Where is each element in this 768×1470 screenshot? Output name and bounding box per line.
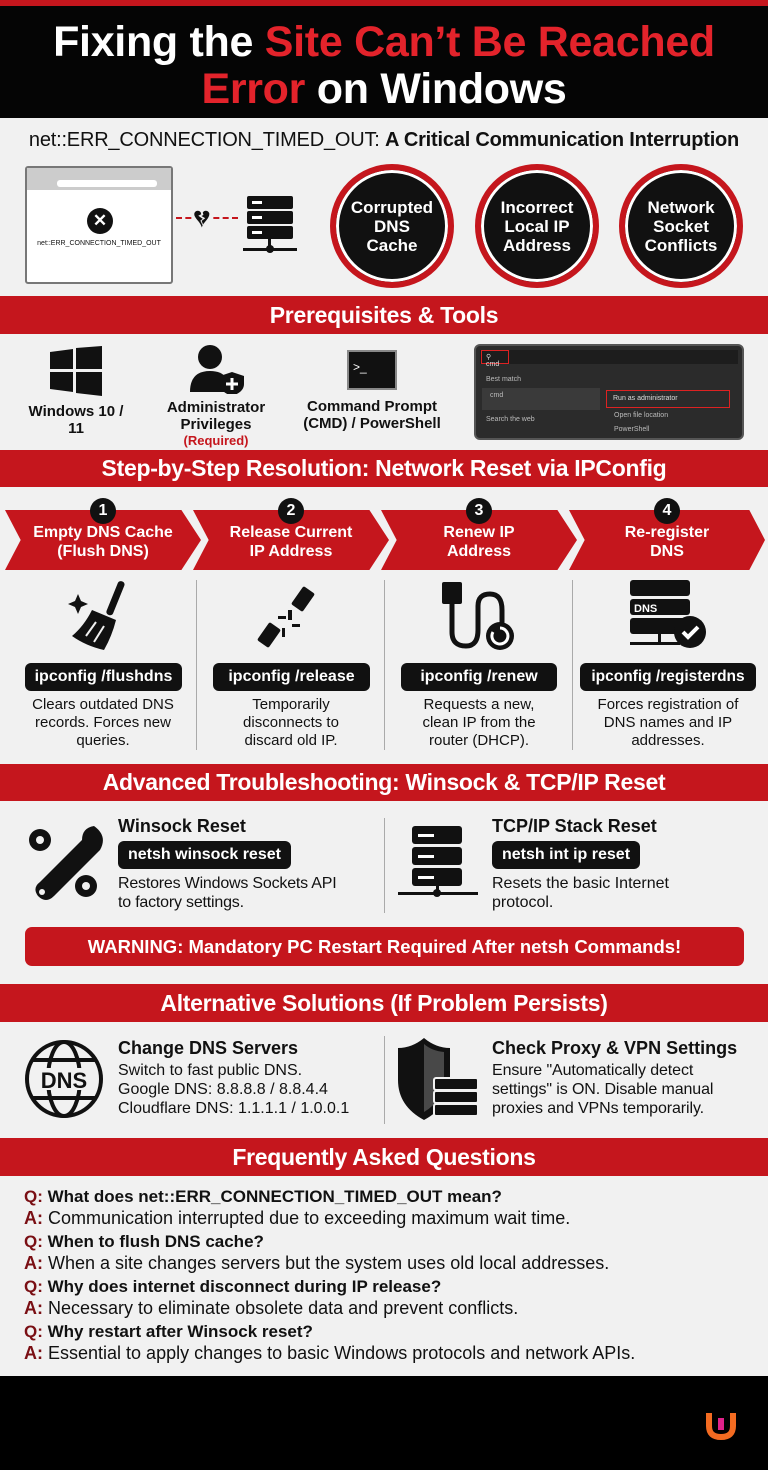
cause: Corrupted DNS Cache bbox=[330, 164, 454, 288]
heading: step-by-step: Step-by-Step Resolution: Network Reset via IPConfig bbox=[102, 455, 666, 481]
cause: Incorrect Local IP Address: Address bbox=[503, 236, 571, 254]
command 3: ipconfig /renew bbox=[420, 668, 538, 685]
cause: Network Socket Conflicts: Network bbox=[647, 198, 715, 216]
prereq: windows bbox=[28, 346, 124, 437]
icon: shield with server bbox=[398, 1038, 477, 1120]
icon: DNS server with check: DNS bbox=[634, 603, 657, 615]
screenshot: run as admin bbox=[474, 344, 744, 440]
proxy block: proxies and VPNs temporarily. bbox=[492, 1100, 704, 1117]
tcp/ip block: TCP/IP Stack Reset bbox=[492, 816, 657, 836]
command 4: ipconfig /registerdns bbox=[591, 668, 745, 685]
title bbox=[53, 18, 715, 113]
desc 1: Clears outdated DNS records. Forces new queries. bbox=[32, 696, 174, 749]
heading: Prerequisites bbox=[0, 296, 768, 334]
desc 3: Requests a new, clean IP from the router (DHCP). bbox=[422, 696, 536, 749]
subtitle: net::ERR_CONNECTION_TIMED_OUT: A Critical Communication Interruption bbox=[29, 129, 739, 151]
arrow with broken heart: 💔︎ bbox=[194, 203, 210, 233]
screenshot: run as admin: PowerShell bbox=[614, 426, 649, 433]
prereq: cmd: >_ bbox=[353, 360, 367, 374]
FAQ list: A: When a site changes servers but the system uses old local addresses. bbox=[24, 1253, 609, 1273]
tcp/ip block: Resets the basic Internet bbox=[492, 875, 669, 892]
screenshot: run as admin: cmd bbox=[490, 392, 503, 399]
FAQ list: Q: Why restart after Winsock reset? bbox=[24, 1322, 313, 1341]
step 2 header: Release Current bbox=[230, 524, 352, 541]
winsock block: Winsock Reset bbox=[118, 816, 246, 836]
screenshot: run as admin: ⚲ cmd bbox=[486, 354, 499, 368]
footer band bbox=[0, 1376, 768, 1470]
step 3 header: Address bbox=[447, 543, 511, 560]
FAQ list: A: Necessary to eliminate obsolete data and prevent conflicts. bbox=[24, 1298, 518, 1318]
tcp/ip block: protocol. bbox=[492, 894, 553, 911]
heading: Prerequisites: Prerequisites & Tools bbox=[270, 302, 498, 328]
proxy block bbox=[492, 1038, 737, 1117]
change DNS block: Cloudflare DNS: 1.1.1.1 / 1.0.0.1 bbox=[118, 1100, 349, 1117]
step arrows bbox=[5, 498, 765, 570]
prereq: windows: 11 bbox=[68, 420, 84, 437]
heading: FAQ bbox=[0, 1138, 768, 1176]
command 3 bbox=[401, 663, 557, 691]
command 1: ipconfig /flushdns bbox=[35, 668, 172, 685]
title: Fixing the Site Can’t Be Reached bbox=[53, 18, 715, 66]
step 3 header bbox=[381, 510, 577, 570]
prereq: admin: Privileges bbox=[181, 416, 251, 433]
cause: Corrupted DNS Cache: DNS bbox=[374, 216, 410, 236]
FAQ list: Q: Why does internet disconnect during IP release? bbox=[24, 1277, 441, 1296]
change DNS block: Change DNS Servers bbox=[118, 1038, 298, 1058]
step arrows: 2 bbox=[287, 502, 295, 519]
prereq: cmd: Command Prompt bbox=[307, 398, 437, 415]
icon: DNS server with check bbox=[630, 580, 706, 648]
prereq: windows: Windows 10 / bbox=[29, 403, 123, 420]
heading: advanced bbox=[0, 764, 768, 801]
logo bbox=[706, 1413, 736, 1440]
winsock block bbox=[118, 816, 336, 911]
proxy block: settings" is ON. Disable manual bbox=[492, 1081, 713, 1098]
proxy block: Ensure "Automatically detect bbox=[492, 1062, 693, 1079]
screenshot: run as admin: Run as administrator bbox=[613, 395, 678, 402]
heading: step-by-step bbox=[0, 450, 768, 487]
winsock block: to factory settings. bbox=[118, 894, 244, 911]
step 4 header bbox=[569, 510, 765, 570]
step 3 header: Renew IP bbox=[443, 524, 515, 541]
prereq: admin: Administrator bbox=[167, 399, 265, 416]
winsock block: netsh winsock reset bbox=[128, 846, 281, 863]
tcp/ip block: netsh int ip reset bbox=[502, 846, 630, 863]
step 4 header: DNS bbox=[650, 543, 684, 560]
icon: wrench and gears bbox=[29, 826, 103, 900]
step 2 header: IP Address bbox=[250, 543, 332, 560]
screenshot: run as admin: Best match bbox=[486, 376, 521, 383]
step 4 header: Re-register bbox=[625, 524, 709, 541]
command 2: ipconfig /release bbox=[228, 668, 355, 685]
icon: server stack bbox=[398, 826, 478, 897]
cause: Incorrect Local IP Address bbox=[475, 164, 599, 288]
icon: unplugged cable bbox=[258, 586, 314, 648]
cause: Network Socket Conflicts: Conflicts bbox=[645, 236, 717, 254]
winsock block: Restores Windows Sockets API bbox=[118, 875, 336, 892]
change DNS block: Google DNS: 8.8.8.8 / 8.8.4.4 bbox=[118, 1081, 328, 1098]
heading: advanced: Advanced Troubleshooting: Winsock & TCP/IP Reset bbox=[103, 769, 665, 795]
icon: broom bbox=[68, 581, 124, 650]
warning callout bbox=[25, 927, 744, 966]
prereq: admin bbox=[167, 345, 265, 448]
FAQ list: Q: What does net::ERR_CONNECTION_TIMED_OUT mean? bbox=[24, 1187, 502, 1206]
screenshot: run as admin: Search the web bbox=[486, 416, 535, 423]
heading: FAQ: Frequently Asked Questions bbox=[232, 1144, 536, 1170]
icon: cable renew bbox=[442, 582, 514, 650]
cause: Network Socket Conflicts bbox=[619, 164, 743, 288]
step arrows: 1 bbox=[99, 502, 107, 519]
browser error illustration: ✕ bbox=[93, 211, 107, 230]
icon: DNS globe bbox=[25, 1040, 103, 1118]
cause: Incorrect Local IP Address: Local IP bbox=[504, 216, 570, 236]
FAQ list bbox=[24, 1187, 635, 1363]
change DNS block: Switch to fast public DNS. bbox=[118, 1062, 302, 1079]
step 2 header bbox=[193, 510, 389, 570]
command 2 bbox=[213, 663, 370, 691]
command 4 bbox=[580, 663, 756, 691]
prereq: admin: (Required) bbox=[184, 433, 248, 448]
title: Error on Windows bbox=[201, 65, 567, 113]
icon: DNS globe: DNS bbox=[41, 1068, 87, 1093]
tcp/ip block bbox=[492, 816, 669, 911]
cause: Incorrect Local IP Address: Incorrect bbox=[501, 198, 573, 216]
cause: Corrupted DNS Cache: Corrupted bbox=[351, 198, 433, 216]
warning callout: WARNING: Mandatory PC Restart Required After netsh Commands! bbox=[88, 936, 681, 957]
screenshot: run as admin: Open file location bbox=[614, 412, 668, 419]
step 1 header: (Flush DNS) bbox=[57, 543, 149, 560]
cause: Corrupted DNS Cache: Cache bbox=[366, 236, 418, 254]
title band bbox=[0, 0, 768, 118]
FAQ list: A: Communication interrupted due to exceeding maximum wait time. bbox=[24, 1208, 570, 1228]
prereq: cmd bbox=[303, 350, 441, 432]
command 1 bbox=[25, 663, 182, 691]
step arrows: 4 bbox=[663, 502, 671, 519]
prereq: cmd: (CMD) / PowerShell bbox=[303, 415, 441, 432]
FAQ list: A: Essential to apply changes to basic Windows protocols and network APIs. bbox=[24, 1343, 635, 1363]
desc 4: Forces registration of DNS names and IP addresses. bbox=[598, 696, 738, 749]
browser error illustration: net::ERR_CONNECTION_TIMED_OUT bbox=[37, 240, 161, 247]
change DNS block bbox=[118, 1038, 349, 1117]
browser error illustration bbox=[25, 166, 173, 284]
icon: server bbox=[243, 196, 297, 253]
FAQ list: Q: When to flush DNS cache? bbox=[24, 1232, 264, 1251]
step 1 header bbox=[5, 510, 201, 570]
cause: Network Socket Conflicts: Socket bbox=[653, 216, 709, 236]
heading: alternative: Alternative Solutions (If Problem Persists) bbox=[160, 990, 608, 1016]
desc 2: Temporarily disconnects to discard old IP. bbox=[243, 696, 339, 749]
step arrows: 3 bbox=[475, 502, 483, 519]
heading: alternative bbox=[0, 984, 768, 1022]
step 1 header: Empty DNS Cache bbox=[33, 524, 173, 541]
proxy block: Check Proxy & VPN Settings bbox=[492, 1038, 737, 1058]
